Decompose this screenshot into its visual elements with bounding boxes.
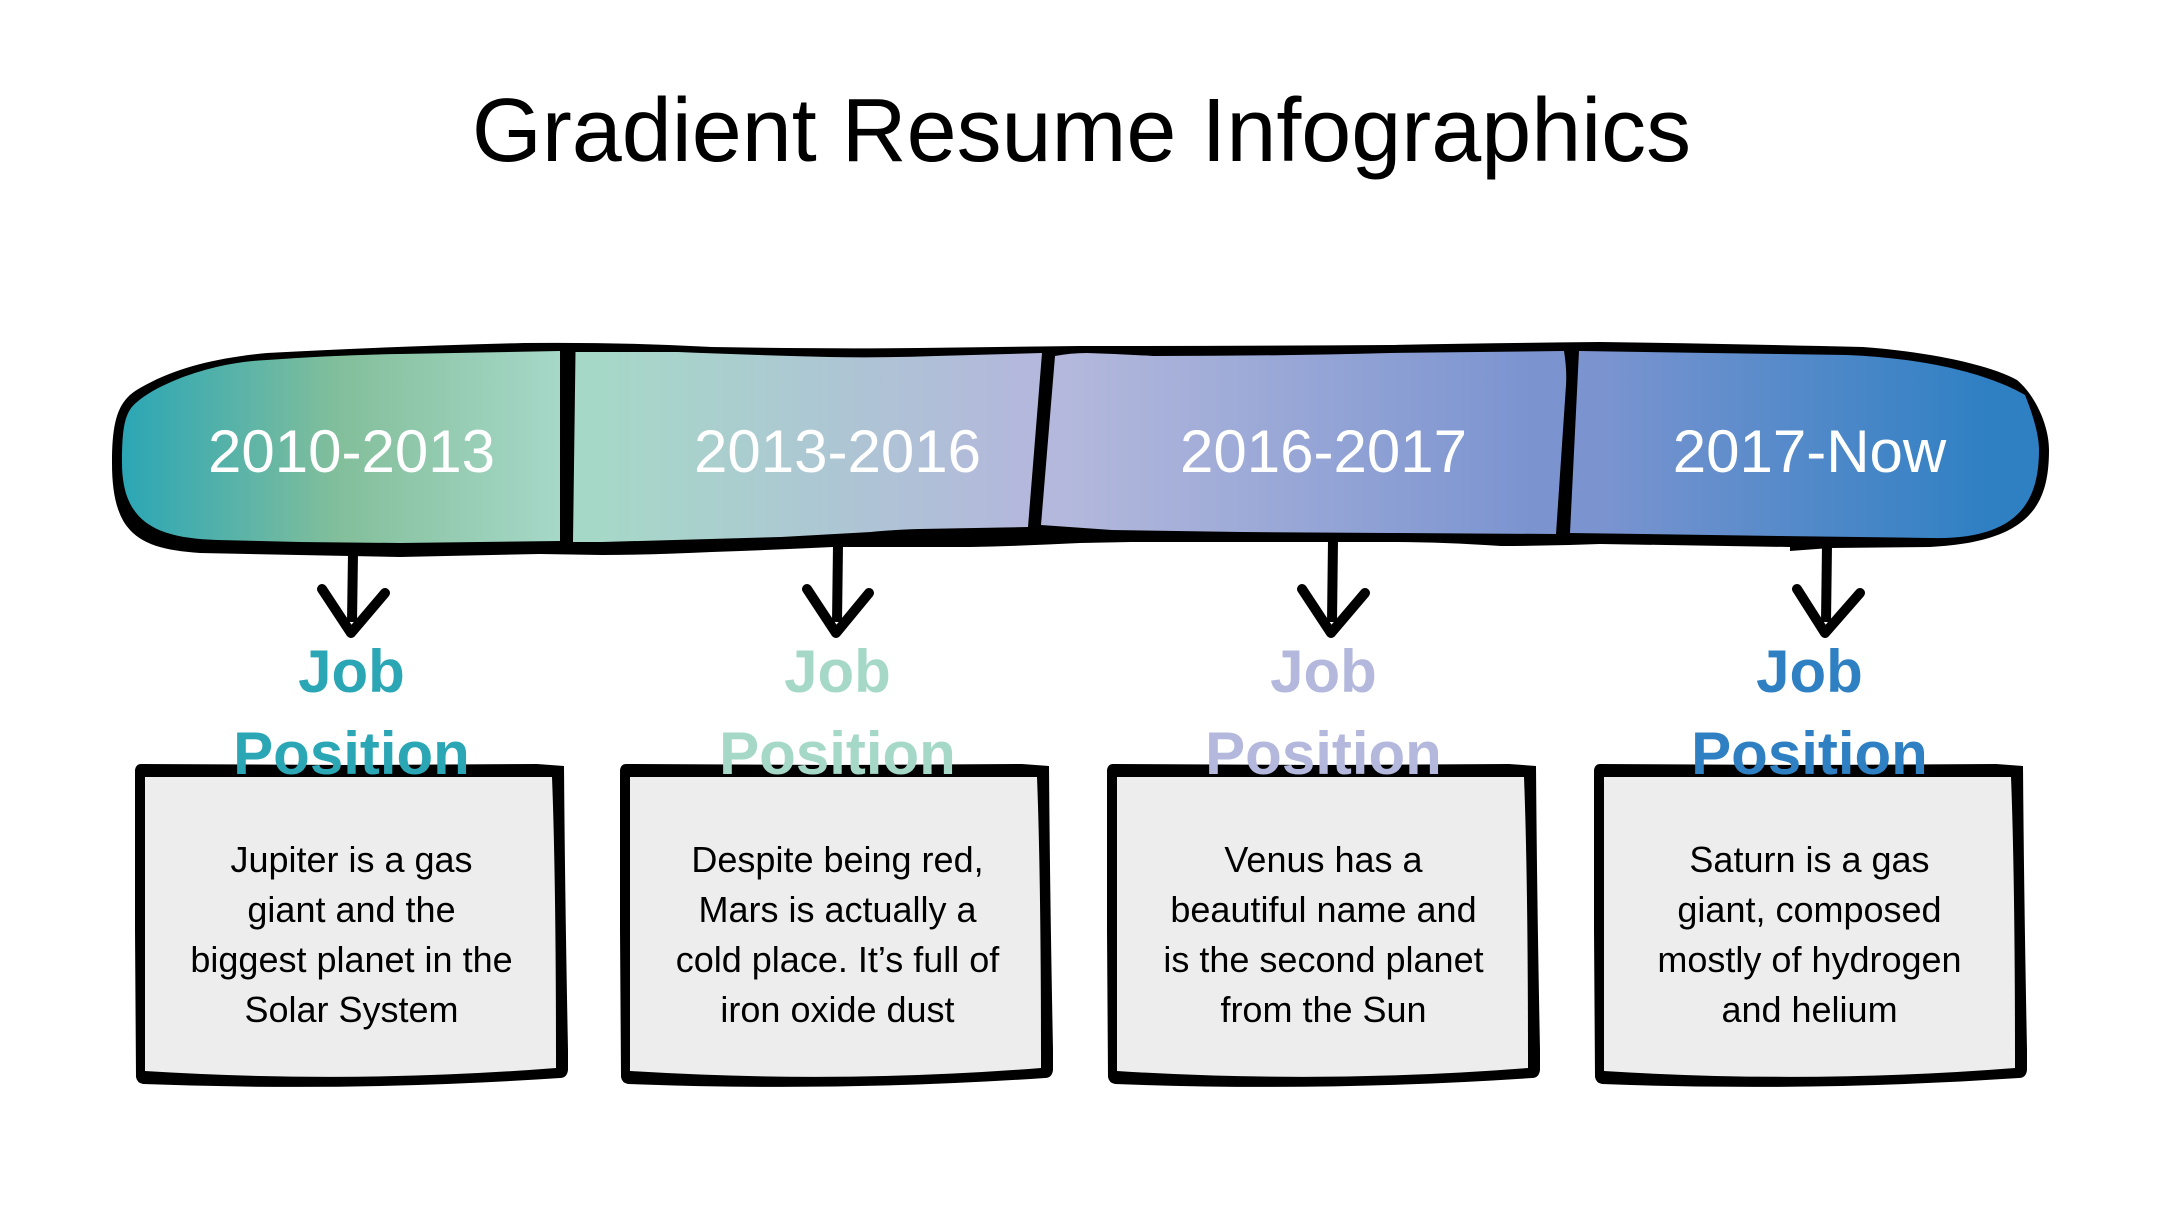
text block: Jupiter: biggest planet in the (190, 939, 513, 980)
heading: job position 2: Position (719, 720, 956, 787)
heading: job position 4: Position (1691, 720, 1928, 787)
text block: Venus: from the Sun (1220, 989, 1427, 1030)
segment: 2013-2016: 2013-2016 (694, 418, 981, 485)
text block: Saturn: and helium (1721, 989, 1898, 1030)
text block: Venus: beautiful name and (1170, 889, 1477, 930)
title: Gradient Resume Infographics (472, 81, 1691, 181)
timeline bar (112, 342, 2049, 557)
text block: Mars: iron oxide dust (720, 989, 955, 1030)
text block: Venus: is the second planet (1163, 939, 1484, 980)
segment: 2010-2013 (122, 351, 560, 543)
panel: card 3 box (1107, 764, 1540, 1087)
arrow 4 (1797, 545, 1860, 633)
text block: Jupiter: Solar System (244, 989, 459, 1030)
segment: 2013-2016 (573, 352, 1042, 542)
text block: Jupiter: Jupiter is a gas (230, 839, 473, 880)
heading: job position 3: Job (1270, 638, 1377, 705)
segment: 2017-Now (1570, 351, 2039, 538)
segment: 2016-2017: 2016-2017 (1180, 418, 1467, 485)
text block: Mars: cold place. It’s full of (676, 939, 1000, 980)
text block: Mars: Despite being red, (691, 839, 984, 880)
heading: job position 2: Job (784, 638, 891, 705)
heading: job position 1: Position (233, 720, 470, 787)
heading: job position 4: Job (1756, 638, 1863, 705)
panel: card 2 box (620, 764, 1053, 1087)
arrow 3 (1302, 540, 1365, 633)
segment: 2016-2017 (1041, 351, 1566, 534)
text block: Saturn: mostly of hydrogen (1657, 939, 1962, 980)
arrow 1 (322, 553, 385, 633)
segment: 2010-2013: 2010-2013 (208, 418, 495, 485)
text block: Saturn: Saturn is a gas (1689, 839, 1930, 880)
arrow 2 (807, 545, 869, 633)
text block: Saturn: giant, composed (1677, 889, 1942, 930)
heading: job position 1: Job (298, 638, 405, 705)
heading: job position 3: Position (1205, 720, 1442, 787)
text block: Venus: Venus has a (1224, 839, 1424, 880)
segment: 2017-Now: 2017-Now (1673, 418, 1947, 485)
text block: Jupiter: giant and the (247, 889, 456, 930)
panel: card 1 box (135, 764, 568, 1087)
panel: card 4 box (1594, 764, 2027, 1087)
text block: Mars: Mars is actually a (698, 889, 978, 930)
